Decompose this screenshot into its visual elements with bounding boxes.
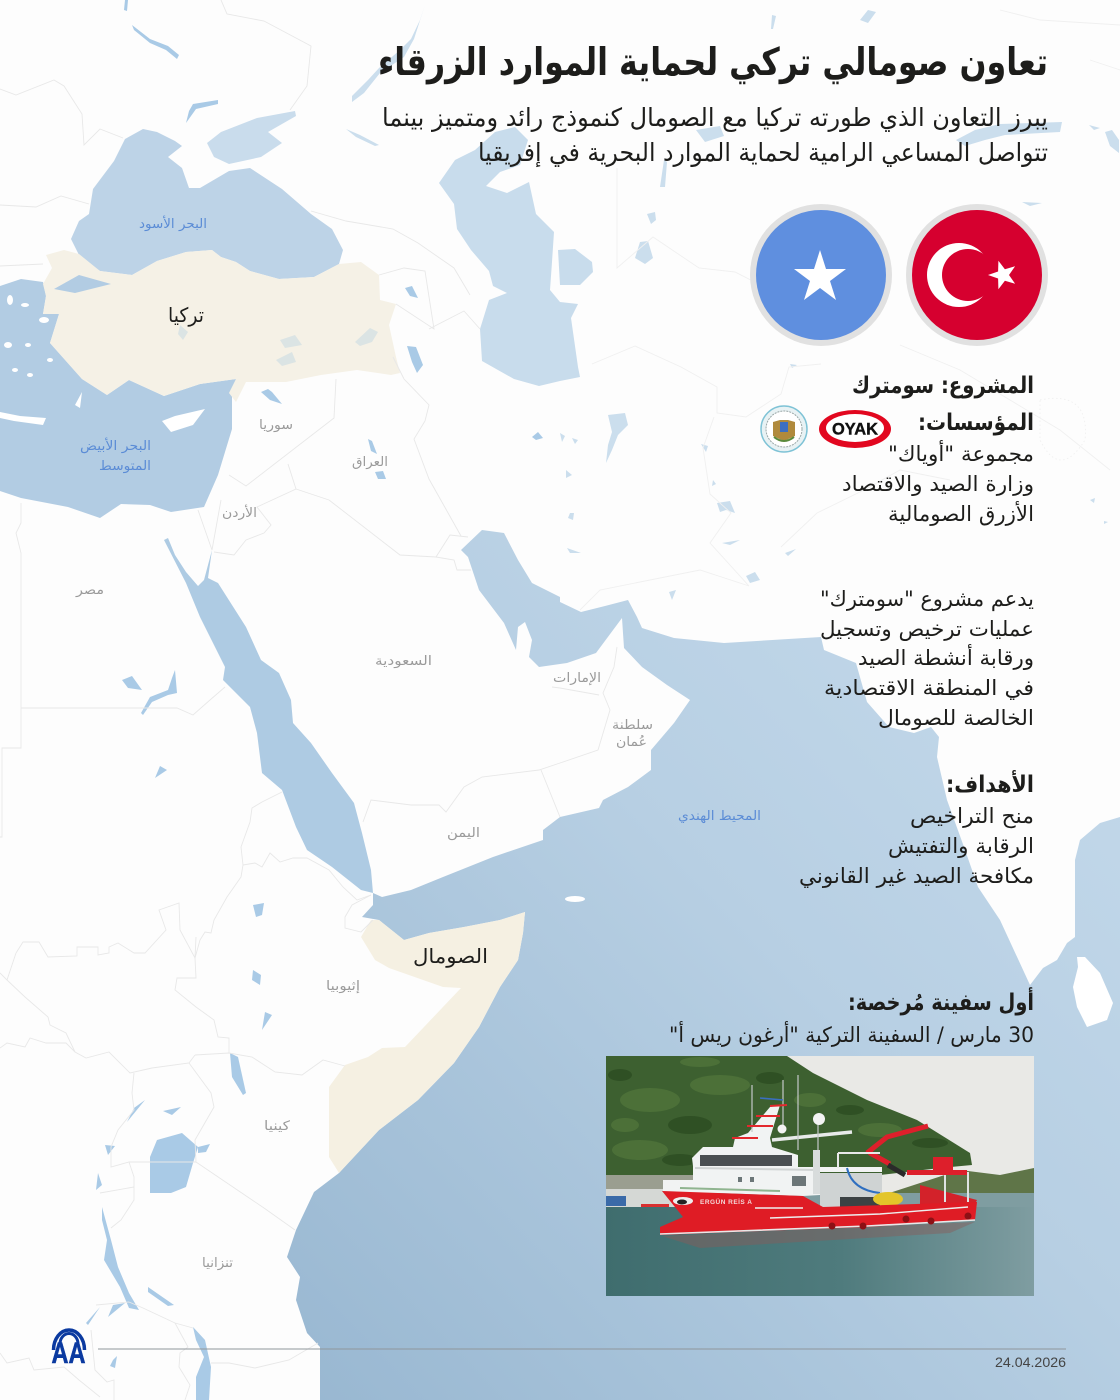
- subtitle: يبرز التعاون الذي طورته تركيا مع الصومال كنموذج رائد ومتميز بينما: [382, 103, 1048, 133]
- map: turkish lakes: [178, 325, 378, 366]
- heading: institutions: المؤسسات:: [918, 410, 1034, 436]
- text: institutions list: وزارة الصيد والاقتصاد: [842, 472, 1034, 496]
- map: country labels: سلطنة: [612, 718, 653, 733]
- map: country labels: تنزانيا: [202, 1256, 233, 1271]
- photo: red fishing vessel: [606, 1056, 1034, 1296]
- map: socotra: [565, 896, 585, 902]
- map: mediterranean: [0, 279, 236, 518]
- heading: project: المشروع: سومترك: [852, 373, 1034, 399]
- map: label turkey: تركيا: [168, 303, 204, 327]
- map: country labels: إثيوبيا: [326, 979, 360, 994]
- map: garabogaz: [558, 249, 593, 285]
- crane: [867, 1126, 928, 1153]
- gray deckhouse: [820, 1173, 882, 1207]
- text: goals list: منح التراخيص: [910, 804, 1034, 828]
- map: country labels: كينيا: [264, 1119, 291, 1134]
- text: goals list: الرقابة والتفتيش: [888, 834, 1034, 858]
- text: project description: في المنطقة الاقتصادية: [824, 676, 1034, 700]
- map: cyprus and crete: [0, 295, 205, 432]
- map: label mediterranean: البحر الأبيض: [80, 437, 151, 454]
- map: country labels: الأردن: [222, 504, 257, 521]
- hull: [660, 1191, 977, 1235]
- map: faint eastern borders: [580, 10, 1120, 610]
- text: institutions list: مجموعة "أوياك": [888, 440, 1034, 466]
- icon: anadolu agency logo: AA: [52, 1337, 86, 1370]
- heading: first licensed vessel: أول سفينة مُرخصة:: [848, 986, 1034, 1016]
- text: institutions list: الأزرق الصومالية: [888, 501, 1034, 526]
- map: label mediterranean: المتوسط: [99, 459, 151, 474]
- map: borders: [0, 0, 617, 1400]
- date: 24.04.2026: [995, 1354, 1066, 1370]
- white superstructure: [663, 1105, 820, 1196]
- heading: goals: الأهداف:: [946, 769, 1034, 798]
- map: country labels: السعودية: [375, 654, 432, 669]
- map: country labels: اليمن: [447, 826, 480, 841]
- text: project description: عمليات ترخيص وتسجيل: [820, 617, 1034, 641]
- map: label mediterranean: [80, 437, 151, 474]
- text: institutions list: [842, 440, 1034, 526]
- map: turkey: [43, 250, 400, 402]
- text: goals list: [799, 804, 1034, 888]
- footer rule: [98, 1348, 1066, 1350]
- map: country labels: سوريا: [259, 418, 293, 433]
- map: lakes: [86, 0, 543, 1400]
- text: vessel detail: 30 مارس / السفينة التركية "أرغون ريس أ": [669, 1021, 1034, 1047]
- map: sea of azov: [207, 111, 296, 164]
- map: black sea: [71, 129, 343, 279]
- text: goals list: مكافحة الصيد غير القانوني: [799, 864, 1034, 888]
- photo: red fishing vessel: ERGÜN REİS A: [700, 1197, 752, 1206]
- aft boat: [920, 1185, 977, 1204]
- map: sea of marmara: [54, 275, 111, 293]
- map: central asian lakes: [560, 10, 1119, 600]
- icon: turkey flag: [906, 204, 1048, 346]
- map: country labels: مصر: [75, 583, 104, 598]
- map: sri lanka: [1073, 957, 1113, 1027]
- icon: ministry emblem: [761, 406, 807, 452]
- subtitle: تتواصل المساعي الرامية لحماية الموارد البحرية في إفريقيا: [478, 138, 1048, 168]
- icon: oyak logo: OYAK: [832, 420, 879, 438]
- map: country labels: [75, 418, 653, 1271]
- text: project description: ورقابة أنشطة الصيد: [858, 644, 1034, 670]
- map: indian ocean: [287, 530, 1120, 1400]
- map: country labels: العراق: [352, 455, 388, 470]
- map: label black sea: البحر الأسود: [139, 215, 207, 232]
- map: country labels: عُمان: [616, 734, 647, 750]
- map: label indian ocean: المحيط الهندي: [678, 809, 761, 824]
- map: red sea: [164, 538, 373, 893]
- map: volga river: [352, 5, 425, 102]
- map: label somalia: الصومال: [413, 944, 488, 968]
- subtitle: [382, 103, 1048, 168]
- map: caspian sea: [439, 127, 580, 386]
- icon: somalia flag: [750, 204, 892, 346]
- icon: oyak logo: [819, 410, 891, 448]
- icon: anadolu agency logo: [52, 1330, 86, 1370]
- map: somalia: [329, 912, 525, 1173]
- map: country labels: الإمارات: [553, 671, 601, 686]
- text: project description: [820, 587, 1034, 730]
- text: project description: يدعم مشروع "سومترك": [820, 587, 1034, 612]
- text: project description: الخالصة للصومال: [878, 706, 1034, 730]
